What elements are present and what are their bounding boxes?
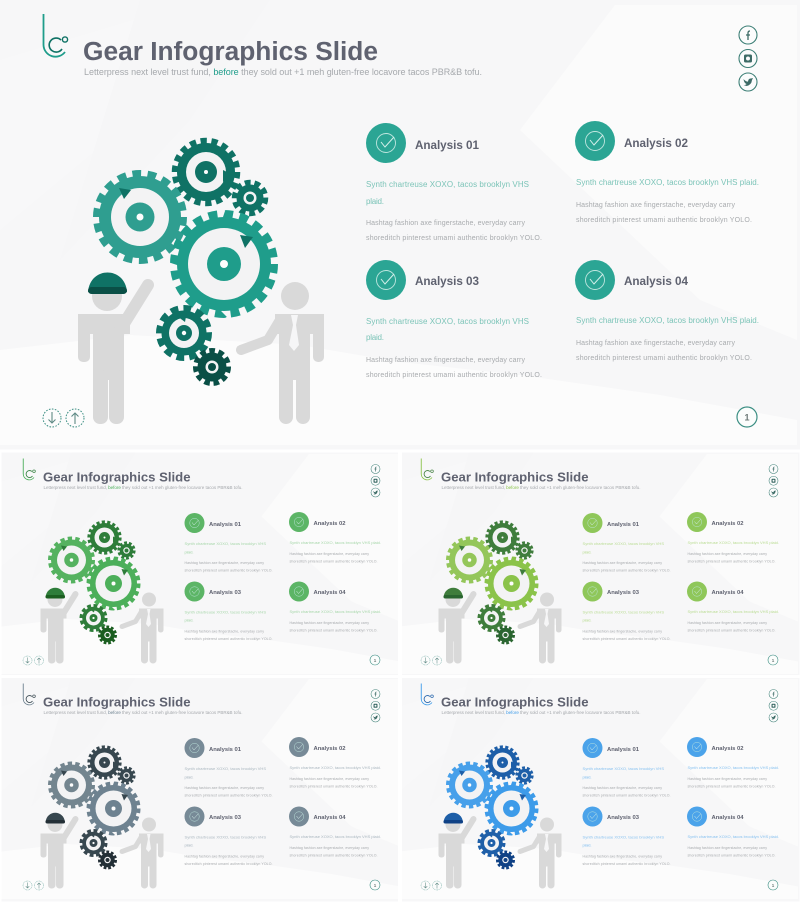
- block: analysis 01: Synth chartreuse XOXO, tacos brooklyn VHS: [184, 766, 266, 771]
- icon: twitter: [371, 713, 380, 722]
- block: analysis 02: Synth chartreuse XOXO, tacos brooklyn VHS plaid.: [576, 178, 759, 187]
- icon: instagram: [769, 476, 778, 485]
- title: Gear Infographics Slide: [43, 470, 190, 484]
- icon: download arrow: [421, 656, 430, 665]
- block: analysis 01: Analysis 01: [209, 747, 242, 753]
- block: analysis 04: Synth chartreuse XOXO, tacos brooklyn VHS plaid.: [688, 609, 779, 614]
- icon: gear cluster: [96, 141, 274, 384]
- page number: [370, 655, 380, 665]
- block: analysis 04: Analysis 04: [314, 815, 346, 821]
- block: analysis 01: [582, 738, 671, 798]
- block: analysis 01: plaid.: [184, 550, 194, 554]
- block: analysis 01: shoreditch pinterest umami authentic brooklyn YOLO.: [582, 568, 671, 572]
- block: analysis 03: plaid.: [184, 618, 194, 622]
- block: analysis 03: Analysis 03: [415, 275, 479, 288]
- icon: upload arrow: [66, 409, 84, 427]
- block: analysis 02: shoreditch pinterest umami authentic brooklyn YOLO.: [290, 784, 378, 788]
- block: analysis 03: Synth chartreuse XOXO, tacos brooklyn VHS: [582, 834, 664, 840]
- block: analysis 04: Hashtag fashion axe fingerstache, everyday carry: [688, 621, 767, 625]
- block: analysis 03: Hashtag fashion axe fingerstache, everyday carry: [184, 854, 264, 858]
- block: analysis 03: Analysis 03: [607, 590, 640, 596]
- icon: twitter: [739, 73, 757, 91]
- block: analysis 03: Synth chartreuse XOXO, tacos brooklyn VHS: [582, 610, 664, 614]
- block: analysis 04: Synth chartreuse XOXO, tacos brooklyn VHS plaid.: [688, 834, 779, 839]
- subtitle: Letterpress next level trust fund, before they sold out +1 meh gluten-free locavore tacos PBR&B tofu.: [44, 710, 242, 715]
- page number: 1: [772, 658, 775, 663]
- block: analysis 01: Synth chartreuse XOXO, tacos brooklyn VHS: [582, 766, 664, 771]
- page number: 1: [374, 658, 377, 663]
- icon: facebook: [371, 690, 380, 698]
- page number: 1: [772, 883, 775, 888]
- block: analysis 01: Synth chartreuse XOXO, tacos brooklyn VHS: [366, 180, 529, 189]
- panel: lime slide: [400, 452, 800, 676]
- block: analysis 01: shoreditch pinterest umami authentic brooklyn YOLO.: [184, 794, 273, 798]
- block: analysis 04: [687, 806, 779, 858]
- block: analysis 02: Synth chartreuse XOXO, tacos brooklyn VHS plaid.: [290, 765, 381, 770]
- block: analysis 04: Synth chartreuse XOXO, tacos brooklyn VHS plaid.: [290, 609, 381, 614]
- icon: logo: [421, 684, 433, 705]
- icon: upload arrow: [34, 656, 44, 665]
- panel: green slide: [2, 452, 402, 676]
- block: analysis 02: [289, 512, 381, 564]
- icon: facebook: [739, 26, 757, 44]
- icon: helmet: [444, 813, 463, 824]
- title: Gear Infographics Slide: [43, 694, 190, 710]
- block: analysis 02: Analysis 02: [712, 746, 744, 752]
- block: analysis 04: Analysis 04: [712, 590, 744, 596]
- block: analysis 02: shoreditch pinterest umami authentic brooklyn YOLO.: [576, 217, 752, 224]
- icon: facebook: [371, 464, 380, 474]
- block: analysis 04: shoreditch pinterest umami authentic brooklyn YOLO.: [290, 854, 378, 858]
- icon: logo: [421, 458, 433, 480]
- block: analysis 04: [687, 582, 779, 632]
- icon: download arrow: [43, 409, 61, 427]
- block: analysis 04: Analysis 04: [712, 815, 744, 821]
- icon: twitter: [769, 713, 778, 722]
- icon: download arrow: [421, 881, 430, 890]
- block: analysis 03: shoreditch pinterest umami authentic brooklyn YOLO.: [184, 637, 273, 641]
- block: analysis 01: plaid.: [184, 774, 194, 780]
- block: analysis 04: Analysis 04: [624, 275, 688, 288]
- block: analysis 04: Hashtag fashion axe fingerstache, everyday carry: [576, 340, 736, 347]
- block: analysis 03: Analysis 03: [209, 590, 242, 596]
- subtitle: Letterpress next level trust fund, before they sold out +1 meh gluten-free locavore tacos PBR&B tofu.: [442, 710, 640, 715]
- block: analysis 01: [366, 123, 542, 242]
- block: analysis 02: shoreditch pinterest umami authentic brooklyn YOLO.: [290, 560, 378, 564]
- icon: worker figure: [438, 817, 474, 888]
- title: Gear Infographics Slide: [83, 36, 378, 66]
- block: analysis 03: plaid.: [366, 333, 384, 342]
- icon: facebook: [769, 464, 778, 474]
- block: analysis 04: [289, 806, 381, 858]
- icon: manager figure: [122, 592, 164, 664]
- block: analysis 04: shoreditch pinterest umami authentic brooklyn YOLO.: [688, 854, 776, 858]
- icon: logo: [44, 14, 68, 57]
- icon: logo: [23, 458, 35, 480]
- block: analysis 01: Hashtag fashion axe fingerstache, everyday carry: [582, 786, 662, 790]
- page number: [768, 655, 778, 665]
- icon: twitter: [371, 488, 380, 497]
- icon: worker figure: [78, 281, 148, 424]
- panel: grey slide: [2, 676, 402, 902]
- block: analysis 04: Hashtag fashion axe fingerstache, everyday carry: [688, 846, 767, 850]
- icon: instagram: [769, 701, 778, 710]
- block: analysis 04: shoreditch pinterest umami authentic brooklyn YOLO.: [688, 628, 776, 632]
- icon: manager figure: [122, 818, 164, 888]
- block: analysis 03: shoreditch pinterest umami authentic brooklyn YOLO.: [366, 372, 542, 379]
- block: analysis 02: Analysis 02: [314, 746, 346, 752]
- block: analysis 03: plaid.: [582, 618, 592, 622]
- icon: twitter: [769, 488, 778, 497]
- block: analysis 04: Analysis 04: [314, 590, 346, 596]
- block: analysis 02: Analysis 02: [712, 521, 744, 527]
- block: analysis 03: Analysis 03: [607, 815, 640, 821]
- block: analysis 03: plaid.: [582, 842, 592, 848]
- block: analysis 01: shoreditch pinterest umami authentic brooklyn YOLO.: [184, 568, 273, 572]
- block: analysis 02: shoreditch pinterest umami authentic brooklyn YOLO.: [688, 560, 776, 564]
- page number: [370, 880, 380, 890]
- page number: 1: [744, 412, 750, 422]
- icon: download arrow: [23, 656, 32, 665]
- block: analysis 01: plaid.: [582, 774, 592, 780]
- icon: worker figure: [40, 592, 76, 664]
- block: analysis 03: Hashtag fashion axe fingerstache, everyday carry: [582, 854, 662, 858]
- title: Gear Infographics Slide: [441, 470, 588, 484]
- block: analysis 02: Analysis 02: [624, 137, 688, 150]
- icon: manager figure: [520, 818, 562, 888]
- subtitle: Letterpress next level trust fund, before they sold out +1 meh gluten-free locavore tacos PBR&B tofu.: [44, 485, 242, 490]
- title: Gear Infographics Slide: [441, 694, 588, 710]
- block: analysis 02: Synth chartreuse XOXO, tacos brooklyn VHS plaid.: [688, 540, 779, 545]
- block: analysis 02: Analysis 02: [314, 521, 346, 527]
- page number: 1: [374, 883, 377, 888]
- block: analysis 01: Analysis 01: [209, 522, 242, 528]
- block: analysis 01: Hashtag fashion axe fingerstache, everyday carry: [184, 786, 264, 790]
- icon: upload arrow: [34, 881, 44, 890]
- icon: helmet: [444, 588, 463, 598]
- block: analysis 03: [184, 582, 273, 641]
- block: analysis 03: Hashtag fashion axe fingerstache, everyday carry: [582, 630, 662, 634]
- block: analysis 01: plaid.: [366, 197, 384, 206]
- block: analysis 04: shoreditch pinterest umami authentic brooklyn YOLO.: [576, 355, 752, 362]
- icon: manager figure: [241, 282, 324, 424]
- icon: download arrow: [23, 881, 32, 890]
- block: analysis 04: Hashtag fashion axe fingerstache, everyday carry: [290, 846, 369, 850]
- block: analysis 04: Synth chartreuse XOXO, tacos brooklyn VHS plaid.: [576, 316, 759, 325]
- icon: gear cluster: [448, 747, 536, 868]
- block: analysis 01: Hashtag fashion axe fingerstache, everyday carry: [366, 220, 526, 227]
- block: analysis 01: Analysis 01: [607, 747, 640, 753]
- block: analysis 01: Hashtag fashion axe fingerstache, everyday carry: [184, 561, 264, 565]
- block: analysis 01: shoreditch pinterest umami authentic brooklyn YOLO.: [582, 794, 671, 798]
- icon: upload arrow: [432, 881, 442, 890]
- block: analysis 01: Synth chartreuse XOXO, tacos brooklyn VHS: [184, 541, 266, 546]
- block: analysis 03: Hashtag fashion axe fingerstache, everyday carry: [184, 630, 264, 634]
- block: analysis 02: Synth chartreuse XOXO, tacos brooklyn VHS plaid.: [688, 765, 779, 770]
- icon: manager figure: [520, 592, 562, 664]
- icon: instagram: [371, 701, 380, 710]
- block: analysis 02: Hashtag fashion axe fingerstache, everyday carry: [290, 552, 369, 556]
- block: analysis 03: Synth chartreuse XOXO, tacos brooklyn VHS: [366, 317, 529, 326]
- icon: logo: [23, 684, 35, 705]
- block: analysis 03: [184, 806, 273, 866]
- block: analysis 01: Synth chartreuse XOXO, tacos brooklyn VHS: [582, 541, 664, 546]
- block: analysis 01: Analysis 01: [607, 522, 640, 528]
- icon: helmet: [88, 272, 127, 294]
- block: analysis 01: [184, 738, 273, 798]
- icon: helmet: [46, 813, 65, 824]
- block: analysis 04: Synth chartreuse XOXO, tacos brooklyn VHS plaid.: [290, 834, 381, 839]
- block: analysis 01: Hashtag fashion axe fingerstache, everyday carry: [582, 561, 662, 565]
- icon: instagram: [371, 476, 380, 485]
- block: analysis 02: [687, 737, 779, 788]
- block: analysis 04: [575, 260, 759, 362]
- panel: blue slide: [400, 676, 800, 902]
- block: analysis 03: Synth chartreuse XOXO, tacos brooklyn VHS: [184, 834, 266, 840]
- icon: gear cluster: [448, 522, 536, 643]
- block: analysis 02: Hashtag fashion axe fingerstache, everyday carry: [688, 552, 767, 556]
- icon: gear cluster: [50, 522, 138, 643]
- block: analysis 03: [582, 806, 671, 866]
- block: analysis 03: shoreditch pinterest umami authentic brooklyn YOLO.: [582, 862, 671, 866]
- block: analysis 02: shoreditch pinterest umami authentic brooklyn YOLO.: [688, 784, 776, 788]
- block: analysis 03: [366, 260, 542, 379]
- block: analysis 02: Hashtag fashion axe fingerstache, everyday carry: [576, 202, 736, 209]
- block: analysis 02: Hashtag fashion axe fingerstache, everyday carry: [688, 777, 767, 781]
- block: analysis 02: [687, 512, 779, 564]
- block: analysis 03: Analysis 03: [209, 815, 242, 821]
- page number: [737, 407, 757, 427]
- icon: worker figure: [438, 592, 474, 664]
- block: analysis 02: [575, 121, 759, 224]
- block: analysis 03: [582, 582, 671, 641]
- block: analysis 04: [289, 582, 381, 632]
- block: analysis 03: plaid.: [184, 842, 194, 848]
- page number: [768, 880, 778, 890]
- icon: helmet: [46, 588, 65, 598]
- block: analysis 01: [582, 513, 671, 572]
- block: analysis 03: shoreditch pinterest umami authentic brooklyn YOLO.: [582, 637, 671, 641]
- block: analysis 01: Analysis 01: [415, 139, 479, 152]
- icon: instagram: [739, 50, 757, 68]
- block: analysis 02: Synth chartreuse XOXO, tacos brooklyn VHS plaid.: [290, 540, 381, 545]
- block: analysis 01: shoreditch pinterest umami authentic brooklyn YOLO.: [366, 235, 542, 242]
- block: analysis 01: [184, 513, 273, 572]
- block: analysis 04: shoreditch pinterest umami authentic brooklyn YOLO.: [290, 628, 378, 632]
- icon: upload arrow: [432, 656, 442, 665]
- block: analysis 01: plaid.: [582, 550, 592, 554]
- icon: facebook: [769, 690, 778, 698]
- icon: worker figure: [40, 817, 76, 888]
- block: analysis 03: shoreditch pinterest umami authentic brooklyn YOLO.: [184, 862, 273, 866]
- icon: gear cluster: [50, 747, 138, 868]
- block: analysis 04: Hashtag fashion axe fingerstache, everyday carry: [290, 621, 369, 625]
- block: analysis 03: Hashtag fashion axe fingerstache, everyday carry: [366, 357, 526, 364]
- subtitle: Letterpress next level trust fund, before they sold out +1 meh gluten-free locavore tacos PBR&B tofu.: [84, 67, 482, 77]
- subtitle: Letterpress next level trust fund, before they sold out +1 meh gluten-free locavore tacos PBR&B tofu.: [442, 485, 640, 490]
- block: analysis 02: [289, 737, 381, 788]
- panel: teal slide: [0, 0, 800, 450]
- block: analysis 03: Synth chartreuse XOXO, tacos brooklyn VHS: [184, 610, 266, 614]
- block: analysis 02: Hashtag fashion axe fingerstache, everyday carry: [290, 777, 369, 781]
